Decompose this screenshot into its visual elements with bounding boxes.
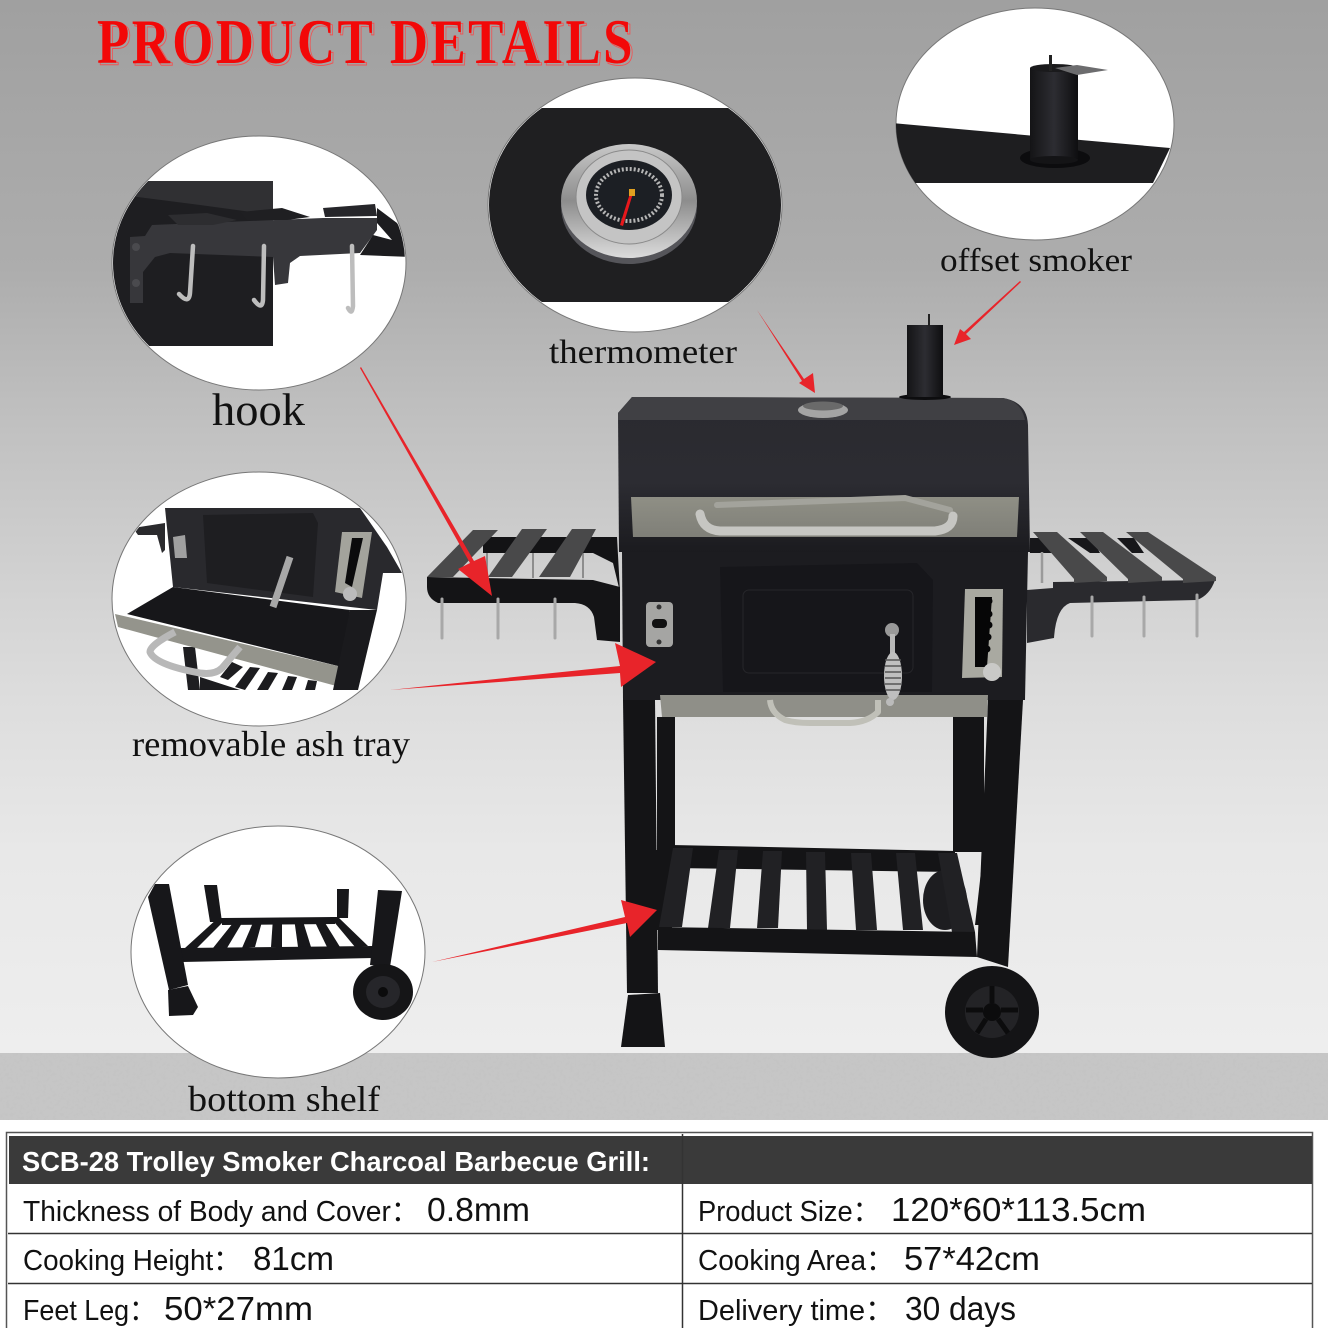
panel: offset smoker close-up: [880, 8, 1174, 240]
left side shelf: [427, 529, 620, 642]
icon: temperature gauge: [561, 144, 697, 264]
arrow: removable ash tray: [390, 643, 656, 690]
steel lid band: [631, 497, 1019, 537]
table header: SCB-28 Trolley Smoker Charcoal Barbecue Grill:: [22, 1146, 650, 1177]
main product: charcoal grill: [427, 314, 1216, 1058]
spec: cooking height: [23, 1240, 334, 1277]
spec: cooking height: 81cm: [253, 1240, 334, 1277]
spec: delivery time: Delivery time：: [698, 1295, 894, 1327]
spec: feet leg: [23, 1290, 313, 1327]
spec: cooking area: 57*42cm: [904, 1240, 1040, 1277]
spec: delivery time: [698, 1290, 1016, 1327]
label: hook: hook: [212, 384, 305, 435]
spec: product size: Product Size：: [698, 1196, 880, 1228]
table header: [9, 1136, 1312, 1184]
specification table: [0, 1120, 1328, 1328]
legs and lower shelf: [621, 700, 1023, 1047]
icon: ash tray drawer: [115, 587, 350, 690]
rear wheel: [923, 870, 967, 930]
bottle opener: [646, 602, 673, 647]
spec: feet leg: Feet Leg：: [23, 1295, 156, 1327]
door: [720, 563, 933, 692]
spec: thickness: Thickness of Body and Cover：: [23, 1196, 419, 1228]
spec: product size: 120*60*113.5cm: [891, 1191, 1146, 1228]
panel: thermometer close-up: [480, 78, 790, 332]
label: thermometer: thermometer: [549, 334, 738, 371]
spec: cooking area: Cooking Area：: [698, 1245, 894, 1277]
title: PRODUCT DETAILS: [97, 6, 635, 77]
arrow: offset smoker: [954, 281, 1021, 345]
arrow: thermometer: [757, 310, 815, 393]
panel: bottom shelf close-up: [131, 826, 425, 1078]
lid: [618, 397, 1030, 552]
lid handle: [700, 498, 953, 531]
spec: feet leg: 50*27mm: [164, 1290, 313, 1327]
spec: thickness: [23, 1191, 530, 1228]
spec: product size: [698, 1191, 1146, 1228]
ash tray handle: [770, 700, 878, 723]
label: offset smoker: offset smoker: [940, 243, 1132, 279]
air vent: [962, 589, 1003, 681]
spec: cooking height: Cooking Height：: [23, 1245, 241, 1277]
firebox body: [622, 552, 1028, 700]
icon: shelf wheel: [353, 964, 413, 1020]
chimney: [899, 314, 951, 400]
door spring handle: [884, 623, 902, 706]
label: bottom shelf: bottom shelf: [188, 1079, 380, 1119]
spec: delivery time: 30 days: [905, 1290, 1016, 1327]
panel: removable ash tray close-up: [112, 472, 406, 726]
spec: cooking area: [698, 1240, 1040, 1277]
front wheel: [945, 966, 1039, 1058]
ash tray front: [660, 695, 988, 717]
arrow: bottom shelf: [432, 900, 657, 962]
spec: thickness: 0.8mm: [427, 1191, 530, 1228]
right side shelf: [1027, 532, 1216, 643]
shelf slats: [659, 848, 975, 932]
label: removable ash tray: removable ash tray: [132, 724, 410, 764]
title: PRODUCT DETAILS: [99, 8, 637, 79]
icon: hooks: [179, 246, 353, 312]
thermometer on lid: [798, 402, 848, 418]
panel: hook close-up: [100, 136, 410, 390]
shelf front bar: [658, 927, 977, 957]
icon: chimney: [1020, 55, 1108, 168]
arrow: hook: [360, 367, 492, 596]
